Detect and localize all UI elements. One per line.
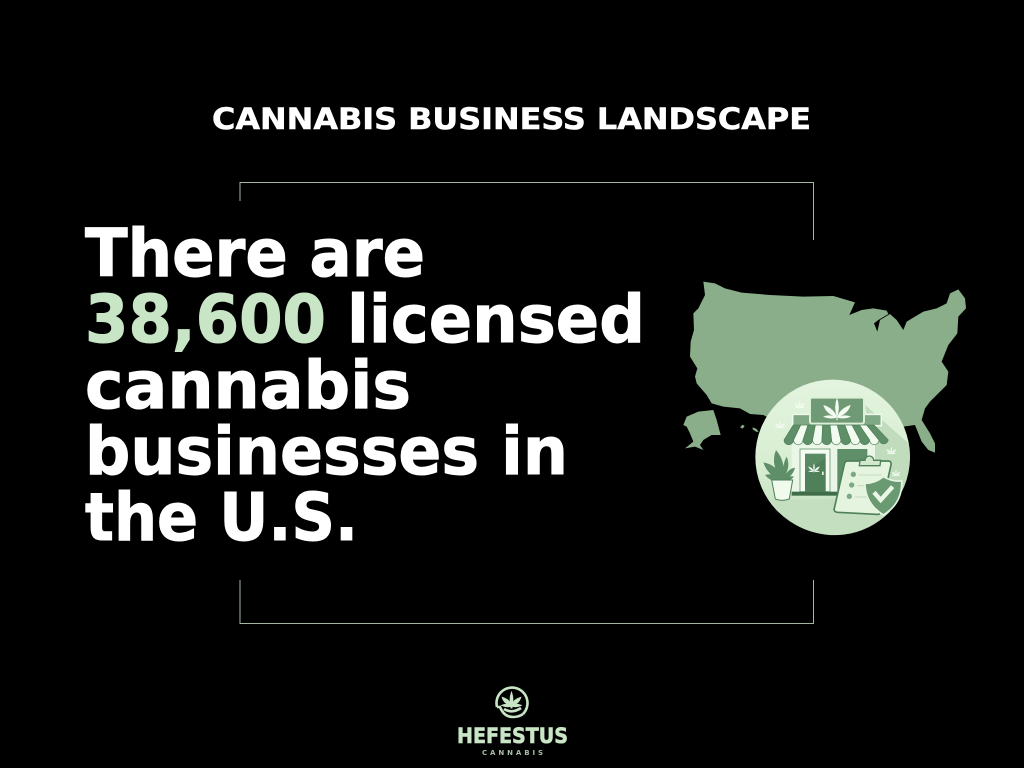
frame bbox=[240, 182, 814, 624]
store roof box bbox=[793, 414, 881, 426]
title: CANNABIS BUSINESS LANDSCAPE bbox=[212, 102, 811, 136]
awning bbox=[784, 425, 888, 445]
logo: Hefestus Cannabis bbox=[457, 688, 568, 757]
headline: licensed bbox=[347, 281, 645, 358]
wordmark: HEFESTUS bbox=[457, 724, 568, 748]
map of the United States bbox=[683, 282, 966, 453]
headline: There are bbox=[85, 215, 425, 292]
store wall bbox=[792, 442, 875, 493]
headline: 38,600 bbox=[85, 281, 326, 358]
cannabis leaves bbox=[775, 398, 900, 477]
headline: the U.S. bbox=[85, 479, 358, 556]
security shield bbox=[865, 477, 902, 515]
store door bbox=[800, 449, 830, 492]
store sign bbox=[810, 398, 864, 424]
icon: cannabis storefront badge bbox=[755, 380, 910, 535]
potted plant bbox=[763, 450, 795, 481]
Hawaii islands bbox=[740, 425, 759, 432]
headline bbox=[85, 215, 645, 556]
Alaska bbox=[683, 410, 721, 450]
logo icon bbox=[496, 688, 527, 717]
headline: businesses in bbox=[85, 413, 568, 490]
store window bbox=[837, 449, 867, 492]
headline: cannabis bbox=[85, 347, 411, 424]
clipboard checklist bbox=[834, 461, 891, 514]
tagline: CANNABIS bbox=[482, 749, 543, 757]
